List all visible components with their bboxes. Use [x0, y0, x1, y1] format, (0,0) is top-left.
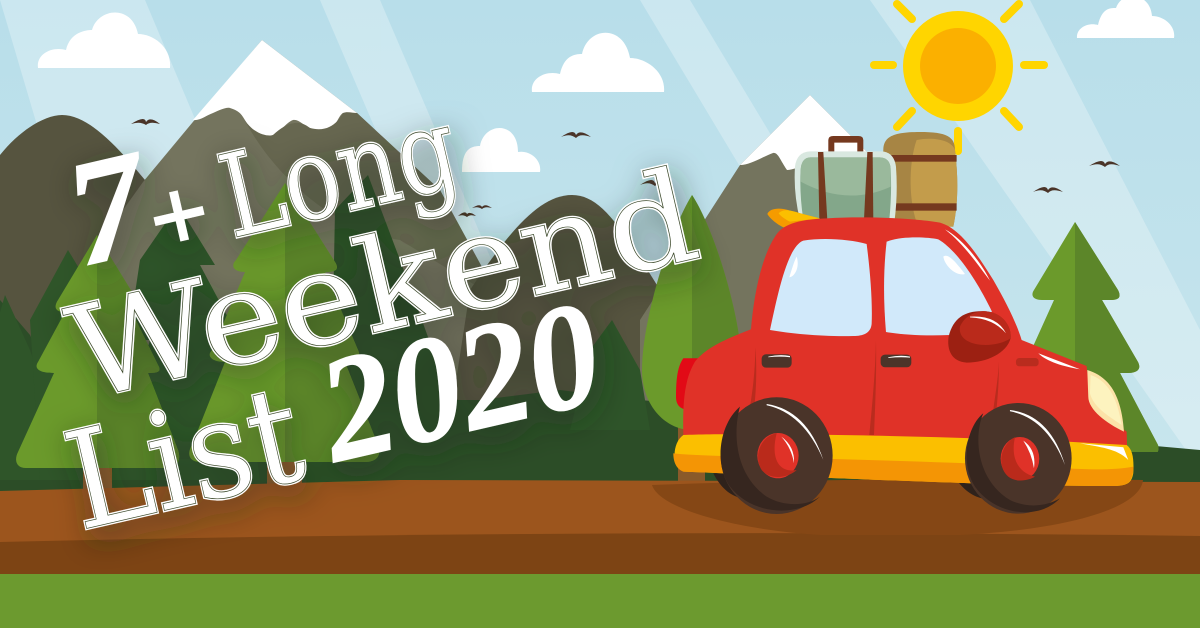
bumper — [675, 434, 1133, 486]
roof highlight — [945, 229, 990, 281]
hood details — [1016, 358, 1039, 366]
title line: List: List — [52, 355, 316, 561]
taillight — [676, 358, 702, 409]
tree: left green — [16, 235, 179, 495]
ground: dirt — [0, 480, 1200, 575]
forest backdrop — [0, 300, 1200, 500]
mountain: left dark — [0, 115, 200, 420]
cloud centre — [532, 33, 664, 92]
sun rays — [0, 0, 1200, 470]
title line: 7+: 7 — [52, 120, 163, 298]
title — [52, 81, 711, 561]
wheels rear hidden — [713, 473, 990, 500]
rear window — [770, 239, 872, 336]
headlight — [1087, 370, 1124, 432]
forest strip right — [1130, 452, 1200, 482]
tree: right green — [1000, 222, 1159, 456]
front window — [884, 237, 992, 335]
suitcase — [795, 136, 897, 220]
car body — [683, 217, 1127, 453]
ground: grass — [0, 574, 1200, 628]
tree: centre green — [189, 183, 379, 485]
mountain: right — [640, 95, 960, 430]
tree: tall round — [642, 195, 742, 490]
cloud top left — [38, 12, 170, 68]
luggage and car — [673, 132, 1134, 514]
title line: 7+: + — [136, 152, 220, 279]
car shadow — [652, 479, 1143, 535]
mountain: centre back — [450, 195, 680, 420]
title line: 2020: 2020 — [303, 269, 615, 495]
wheel rear — [721, 397, 833, 514]
title line: Long: Long — [208, 81, 470, 265]
title line: Weekend: Weekend — [55, 142, 711, 430]
ground: dark road band — [0, 533, 1200, 578]
mountain: main — [30, 40, 560, 420]
side mirror — [948, 311, 1011, 363]
birds — [131, 119, 1120, 217]
title line: List: List — [52, 355, 316, 561]
cloud behind title — [462, 128, 540, 172]
sun — [874, 4, 1044, 151]
cloud top right — [1077, 0, 1174, 38]
barrel — [882, 132, 957, 227]
surfboard on roof — [767, 209, 820, 227]
dark trees — [0, 175, 650, 480]
wheel front — [965, 403, 1072, 514]
title line: Weekend: Weekend — [55, 142, 711, 430]
door seams — [750, 341, 999, 435]
title line: Long: Long — [208, 81, 470, 265]
door handles — [762, 354, 792, 368]
